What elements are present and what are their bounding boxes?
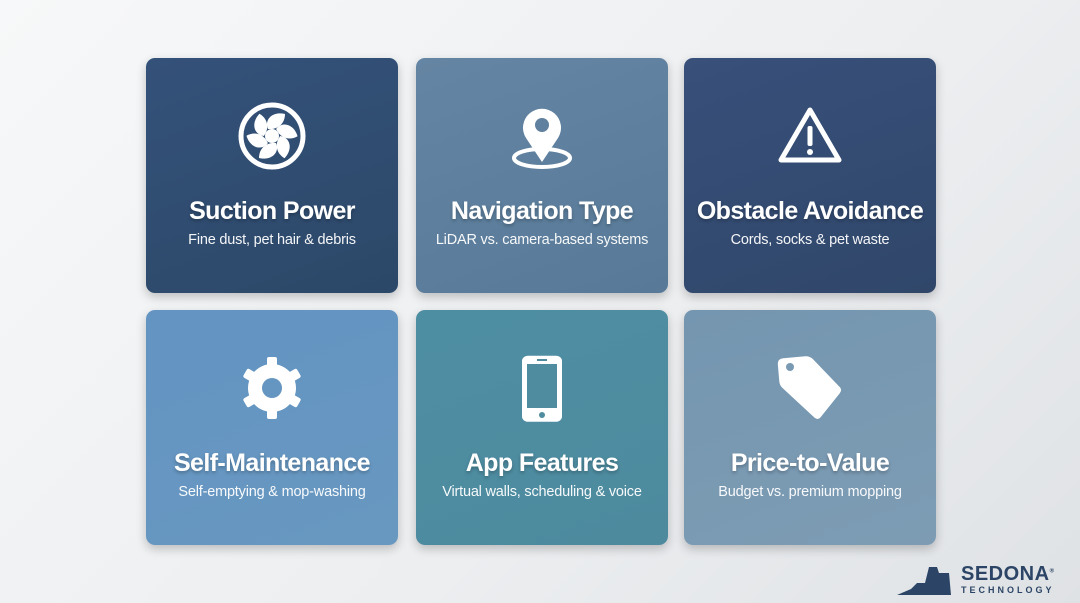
icon: warning — [778, 108, 842, 162]
subtitle: Self-emptying & mop-washing — [178, 484, 366, 500]
logo: Sedona Technology: TECHNOLOGY — [961, 585, 1055, 595]
icon: gear — [243, 357, 301, 419]
logo: Sedona Technology — [897, 563, 1055, 595]
panel: self-maintenance — [146, 310, 398, 545]
subtitle: Fine dust, pet hair & debris — [188, 232, 356, 248]
logo: Sedona Technology: SEDONA® — [961, 563, 1054, 585]
subtitle: Budget vs. premium mopping — [718, 484, 902, 500]
title: Navigation Type — [451, 197, 633, 225]
subtitle: Virtual walls, scheduling & voice — [442, 484, 642, 500]
panel: price-to-value — [684, 310, 936, 545]
icon: location pin — [512, 108, 572, 169]
icon: phone — [522, 356, 562, 422]
panel: navigation type — [416, 58, 668, 293]
subtitle: Cords, socks & pet waste — [731, 232, 889, 248]
icon: fan — [238, 102, 306, 170]
title: Obstacle Avoidance — [697, 197, 923, 225]
subtitle: LiDAR vs. camera-based systems — [436, 232, 648, 248]
panel: app features — [416, 310, 668, 545]
panel: suction power — [146, 58, 398, 293]
title: Suction Power — [189, 197, 355, 225]
icon: price tag — [778, 356, 841, 419]
title: Self-Maintenance — [174, 449, 370, 477]
panel: obstacle avoidance — [684, 58, 936, 293]
title: Price-to-Value — [731, 449, 889, 477]
title: App Features — [466, 449, 618, 477]
